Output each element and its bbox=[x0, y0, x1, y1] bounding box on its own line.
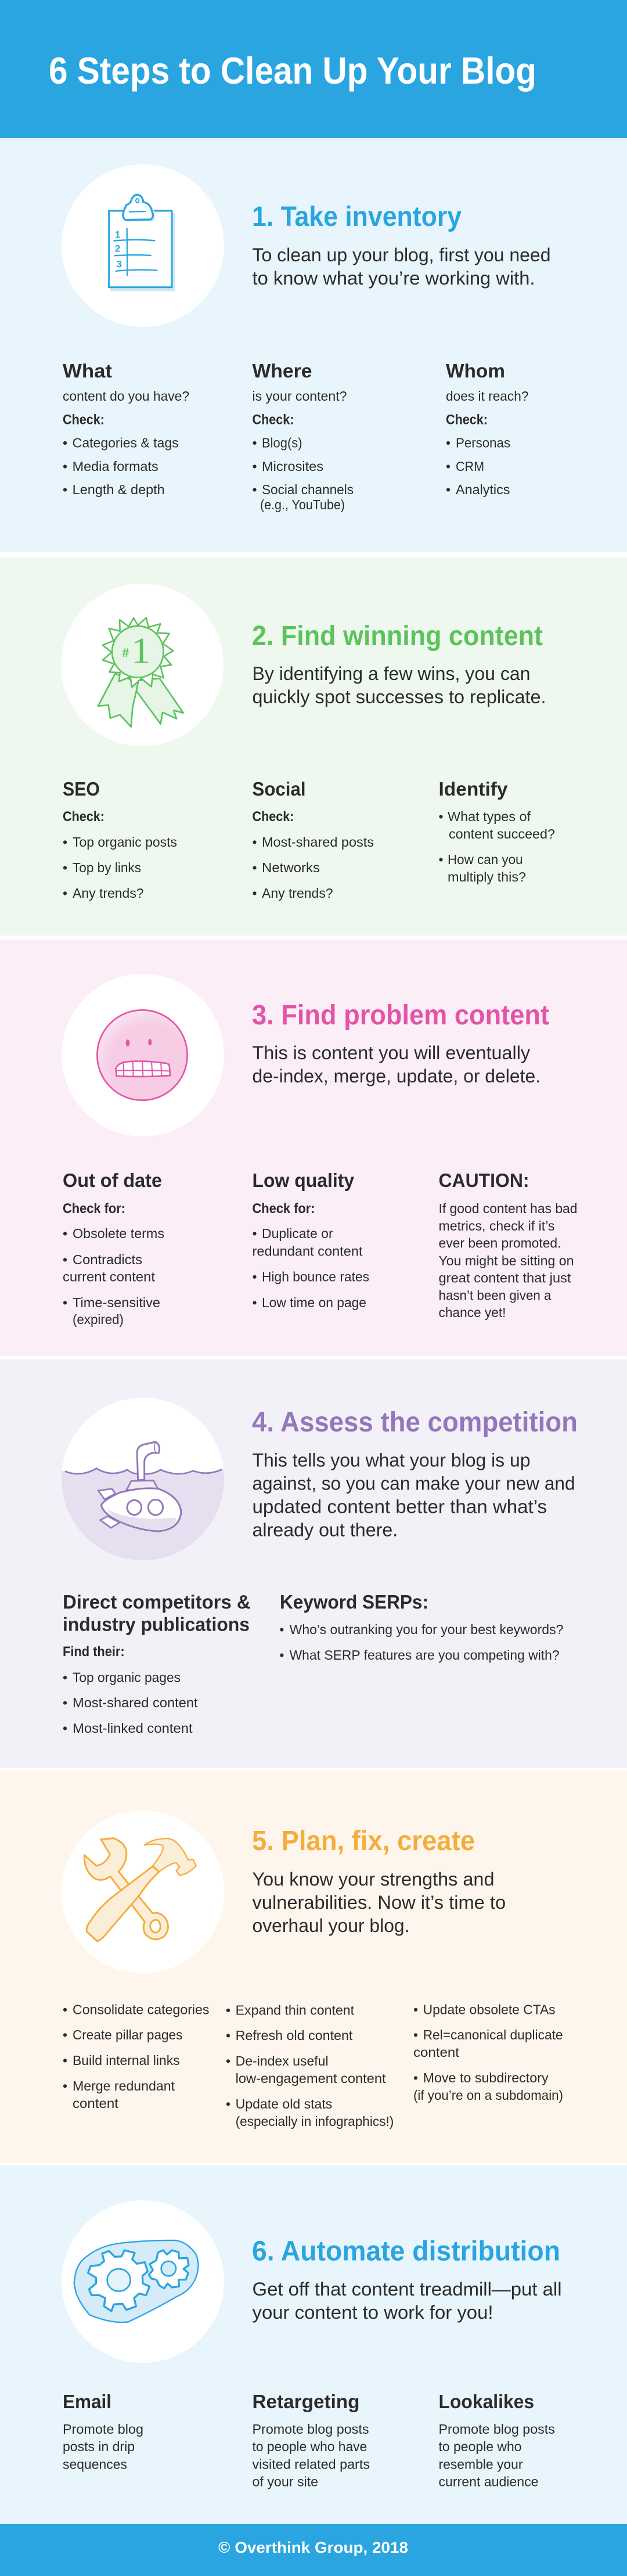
column: direct competitors: • bbox=[63, 1670, 67, 1685]
column: low quality bbox=[252, 1170, 369, 1310]
column: identify: multiply this? bbox=[448, 869, 526, 884]
column: what: Categories & tags bbox=[73, 436, 179, 451]
column: out of date: Check for: bbox=[63, 1201, 125, 1217]
column: where: Where bbox=[252, 360, 312, 382]
column: direct competitors: Top organic pages bbox=[73, 1670, 181, 1685]
column: direct competitors: Direct competitors & bbox=[63, 1591, 251, 1613]
column: what: Media formats bbox=[73, 459, 158, 474]
column: low quality: Low quality bbox=[252, 1170, 355, 1191]
intro text bbox=[252, 1449, 575, 1541]
icon: award ribbon bbox=[61, 584, 224, 746]
column: email: Promote blog bbox=[63, 2422, 143, 2437]
panel: step 2 find winning content bbox=[0, 557, 627, 936]
column: where: Social channels bbox=[262, 482, 354, 497]
column: what: What bbox=[63, 360, 112, 382]
column: identify: content succeed? bbox=[449, 826, 555, 841]
column: out of date: • bbox=[63, 1226, 67, 1241]
column: direct competitors bbox=[63, 1591, 251, 1736]
list: column 1: Build internal links bbox=[73, 2053, 180, 2068]
column: out of date: • bbox=[63, 1252, 67, 1267]
column: social: Any trends? bbox=[262, 886, 333, 901]
column: caution: ever been promoted. bbox=[439, 1236, 561, 1251]
icon: wrench and hammer bbox=[62, 1811, 224, 1973]
column: email: Email bbox=[63, 2391, 111, 2412]
column: identify: • bbox=[439, 809, 444, 824]
column: email: posts in drip bbox=[63, 2439, 135, 2454]
list: column 3: Move to subdirectory bbox=[423, 2070, 549, 2085]
column: whom: Analytics bbox=[456, 482, 510, 497]
intro text bbox=[252, 1869, 506, 1936]
column: keyword SERPs: Keyword SERPs: bbox=[280, 1591, 428, 1613]
header banner bbox=[0, 0, 627, 138]
panel: step 5 plan fix create bbox=[0, 1771, 627, 2163]
column: low quality: • bbox=[252, 1269, 257, 1285]
list: column 2: Update old stats bbox=[236, 2096, 332, 2111]
column: out of date: • bbox=[63, 1295, 67, 1310]
intro text: vulnerabilities. Now it’s time to bbox=[252, 1892, 506, 1913]
column: direct competitors: • bbox=[63, 1721, 67, 1736]
column: SEO: Top by links bbox=[73, 860, 141, 875]
column: whom: • bbox=[446, 459, 451, 474]
column: identify: What types of bbox=[448, 809, 531, 824]
heading: step 2: 2. Find winning content bbox=[252, 621, 543, 652]
column: caution: CAUTION: bbox=[439, 1170, 529, 1191]
list: column 1: • bbox=[63, 2027, 67, 2042]
column: whom bbox=[446, 360, 528, 497]
column: keyword SERPs: • bbox=[279, 1622, 284, 1637]
column: retargeting: to people who have bbox=[252, 2439, 367, 2454]
column: whom: does it reach? bbox=[446, 388, 528, 404]
list: column 3: • bbox=[413, 2027, 418, 2042]
icon: clipboard: 2 bbox=[115, 243, 120, 254]
icon: award ribbon: # bbox=[122, 646, 129, 660]
column: low quality: • bbox=[252, 1295, 257, 1310]
icon: clipboard: 3 bbox=[117, 258, 122, 269]
column: whom: CRM bbox=[456, 459, 484, 474]
list: column 1 bbox=[63, 2002, 209, 2111]
list: column 1: content bbox=[73, 2096, 119, 2111]
column: where: is your content? bbox=[252, 388, 347, 404]
footer banner bbox=[0, 2524, 627, 2576]
column: retargeting: visited related parts bbox=[252, 2456, 370, 2471]
panel: step 6 automate distribution bbox=[0, 2165, 627, 2524]
list: column 1: • bbox=[63, 2053, 67, 2068]
list: column 1: Consolidate categories bbox=[73, 2002, 209, 2017]
column: caution: metrics, check if it’s bbox=[439, 1218, 555, 1233]
column: out of date: Out of date bbox=[63, 1170, 162, 1191]
column: where: • bbox=[252, 436, 257, 451]
column: what bbox=[63, 360, 189, 497]
column: caution: great content that just bbox=[439, 1271, 571, 1286]
column: identify: • bbox=[439, 852, 444, 867]
column: out of date: (expired) bbox=[73, 1312, 124, 1327]
column: identify: Identify bbox=[439, 778, 508, 800]
intro text: By identifying a few wins, you can bbox=[252, 663, 531, 684]
column: SEO: • bbox=[63, 860, 67, 875]
column: out of date bbox=[63, 1170, 164, 1327]
column: low quality: redundant content bbox=[252, 1244, 363, 1259]
intro text: de-index, merge, update, or delete. bbox=[252, 1066, 540, 1086]
column: whom: Personas bbox=[456, 436, 510, 451]
heading: step 3: 3. Find problem content bbox=[252, 1000, 549, 1031]
column: SEO: • bbox=[63, 834, 67, 850]
column: whom: Check: bbox=[446, 412, 488, 427]
column: where: Blog(s) bbox=[262, 436, 302, 451]
column: direct competitors: Find their: bbox=[63, 1644, 125, 1660]
icon: clipboard bbox=[62, 164, 224, 327]
list: column 2: (especially in infographics!) bbox=[236, 2114, 394, 2129]
column: where: Check: bbox=[252, 412, 294, 427]
column: SEO bbox=[63, 778, 177, 901]
column: retargeting: of your site bbox=[252, 2474, 318, 2489]
column: social bbox=[252, 778, 374, 901]
column: identify: How can you bbox=[448, 852, 522, 867]
list: column 2 bbox=[226, 2002, 394, 2129]
column: caution: chance yet! bbox=[439, 1305, 506, 1320]
intro text: This tells you what your blog is up bbox=[252, 1449, 531, 1470]
intro text: against, so you can make your new and bbox=[252, 1473, 575, 1494]
intro text: This is content you will eventually bbox=[252, 1042, 530, 1063]
column: keyword SERPs: • bbox=[279, 1647, 284, 1663]
list: column 3: Update obsolete CTAs bbox=[423, 2002, 556, 2017]
column: caution: hasn’t been given a bbox=[439, 1288, 552, 1303]
intro text: quickly spot successes to replicate. bbox=[252, 686, 546, 707]
intro text: your content to work for you! bbox=[252, 2302, 493, 2323]
column: caution: If good content has bad bbox=[439, 1201, 577, 1216]
column: caution bbox=[439, 1170, 577, 1320]
column: lookalikes: Lookalikes bbox=[439, 2391, 534, 2412]
column: what: Check: bbox=[63, 412, 105, 427]
icon: clipboard: 1 bbox=[115, 229, 120, 240]
panel: step 1 take inventory bbox=[0, 138, 627, 552]
column: SEO: Top organic posts bbox=[73, 834, 177, 850]
copyright line: © Overthink Group, 2018 bbox=[218, 2539, 408, 2556]
column: social: • bbox=[252, 834, 257, 850]
intro text: updated content better than what’s bbox=[252, 1496, 547, 1517]
heading: step 1: 1. Take inventory bbox=[252, 202, 462, 232]
list: column 2: Expand thin content bbox=[236, 2002, 355, 2017]
column: social: • bbox=[252, 886, 257, 901]
list: column 2: • bbox=[226, 2053, 230, 2068]
column: email bbox=[63, 2391, 143, 2471]
column: lookalikes: Promote blog posts bbox=[439, 2422, 555, 2437]
column: out of date: Time-sensitive bbox=[73, 1295, 160, 1310]
column: direct competitors: Most-linked content bbox=[73, 1721, 193, 1736]
intro text: to know what you’re working with. bbox=[252, 268, 535, 289]
column: direct competitors: • bbox=[63, 1695, 67, 1710]
list: column 2: low-engagement content bbox=[236, 2071, 386, 2086]
list: column 2: • bbox=[226, 2002, 230, 2017]
column: retargeting: Promote blog posts bbox=[252, 2422, 369, 2437]
column: direct competitors: Most-shared content bbox=[73, 1695, 198, 1710]
icon: gears bbox=[62, 2200, 224, 2363]
column: out of date: Contradicts bbox=[73, 1252, 142, 1267]
list: column 3: Rel=canonical duplicate bbox=[423, 2027, 563, 2042]
column: SEO: SEO bbox=[63, 778, 100, 800]
column: social: Social bbox=[252, 778, 305, 800]
list: column 2: • bbox=[226, 2096, 230, 2111]
column: identify bbox=[439, 778, 555, 884]
column: caution: You might be sitting on bbox=[439, 1253, 574, 1268]
column: email: sequences bbox=[63, 2456, 127, 2471]
column: whom: • bbox=[446, 482, 451, 497]
column: where: • bbox=[252, 482, 257, 497]
icon: award ribbon: 1 bbox=[131, 631, 150, 671]
column: SEO: Any trends? bbox=[73, 886, 144, 901]
list: column 2: Refresh old content bbox=[236, 2028, 353, 2043]
column: what: Length & depth bbox=[73, 482, 165, 497]
intro text bbox=[252, 663, 546, 707]
icon: submarine bbox=[62, 1398, 224, 1560]
list: column 3: • bbox=[413, 2070, 418, 2085]
heading: step 5: 5. Plan, fix, create bbox=[252, 1826, 475, 1857]
heading: step 4: 4. Assess the competition bbox=[252, 1407, 578, 1438]
column: low quality: Check for: bbox=[252, 1201, 315, 1217]
intro text: To clean up your blog, first you need bbox=[252, 244, 550, 265]
panel: step 3 find problem content bbox=[0, 940, 627, 1356]
intro text bbox=[252, 244, 550, 289]
icon: grimacing face bbox=[62, 974, 224, 1136]
column: out of date: Obsolete terms bbox=[73, 1226, 164, 1241]
column: where: (e.g., YouTube) bbox=[260, 497, 345, 512]
column: SEO: • bbox=[63, 886, 67, 901]
column: low quality: Low time on page bbox=[262, 1295, 366, 1310]
column: keyword SERPs: What SERP features are you competing with? bbox=[290, 1647, 560, 1663]
column: retargeting bbox=[252, 2391, 370, 2489]
column: lookalikes: to people who bbox=[439, 2439, 521, 2454]
column: what: content do you have? bbox=[63, 388, 189, 404]
column: whom: • bbox=[446, 436, 451, 451]
column: where: • bbox=[252, 459, 257, 474]
column: keyword SERPs: Who’s outranking you for your best keywords? bbox=[290, 1622, 563, 1637]
list: column 1: Merge redundant bbox=[73, 2078, 175, 2093]
column: low quality: Duplicate or bbox=[262, 1226, 333, 1241]
column: lookalikes: resemble your bbox=[439, 2456, 523, 2471]
column: low quality: High bounce rates bbox=[262, 1269, 369, 1285]
intro text: Get off that content treadmill—put all bbox=[252, 2279, 562, 2300]
intro text: already out there. bbox=[252, 1520, 398, 1541]
column: social: Check: bbox=[252, 809, 294, 825]
list: column 1: • bbox=[63, 2002, 67, 2017]
title: 6 Steps to Clean Up Your Blog bbox=[49, 49, 536, 92]
intro text bbox=[252, 2279, 562, 2323]
column: low quality: • bbox=[252, 1226, 257, 1241]
column: keyword SERPs bbox=[279, 1591, 563, 1663]
column: SEO: Check: bbox=[63, 809, 105, 825]
column: retargeting: Retargeting bbox=[252, 2391, 360, 2412]
column: social: Most-shared posts bbox=[262, 834, 374, 850]
panel: step 4 assess the competition bbox=[0, 1359, 627, 1768]
intro text bbox=[252, 1042, 540, 1086]
list: column 3: • bbox=[413, 2002, 418, 2017]
column: what: • bbox=[63, 459, 67, 474]
column: what: • bbox=[63, 482, 67, 497]
heading: step 6: 6. Automate distribution bbox=[252, 2236, 560, 2267]
column: social: • bbox=[252, 860, 257, 875]
column: where: Microsites bbox=[262, 459, 323, 474]
column: what: • bbox=[63, 436, 67, 451]
list: column 1: Create pillar pages bbox=[73, 2027, 182, 2042]
column: lookalikes: current audience bbox=[439, 2474, 539, 2489]
column: whom: Whom bbox=[446, 360, 505, 382]
list: column 3: (if you’re on a subdomain) bbox=[413, 2088, 563, 2103]
intro text: overhaul your blog. bbox=[252, 1915, 410, 1936]
list: column 1: • bbox=[63, 2078, 67, 2093]
intro text: You know your strengths and bbox=[252, 1869, 495, 1890]
column: direct competitors: industry publications bbox=[63, 1614, 250, 1635]
column: lookalikes bbox=[439, 2391, 555, 2489]
list: column 2: De-index useful bbox=[236, 2053, 329, 2068]
list: column 3: content bbox=[413, 2045, 460, 2060]
list: column 2: • bbox=[226, 2028, 230, 2043]
column: social: Networks bbox=[262, 860, 320, 875]
list: column 3 bbox=[413, 2002, 563, 2103]
column: out of date: current content bbox=[63, 1269, 156, 1285]
column: where bbox=[252, 360, 354, 512]
